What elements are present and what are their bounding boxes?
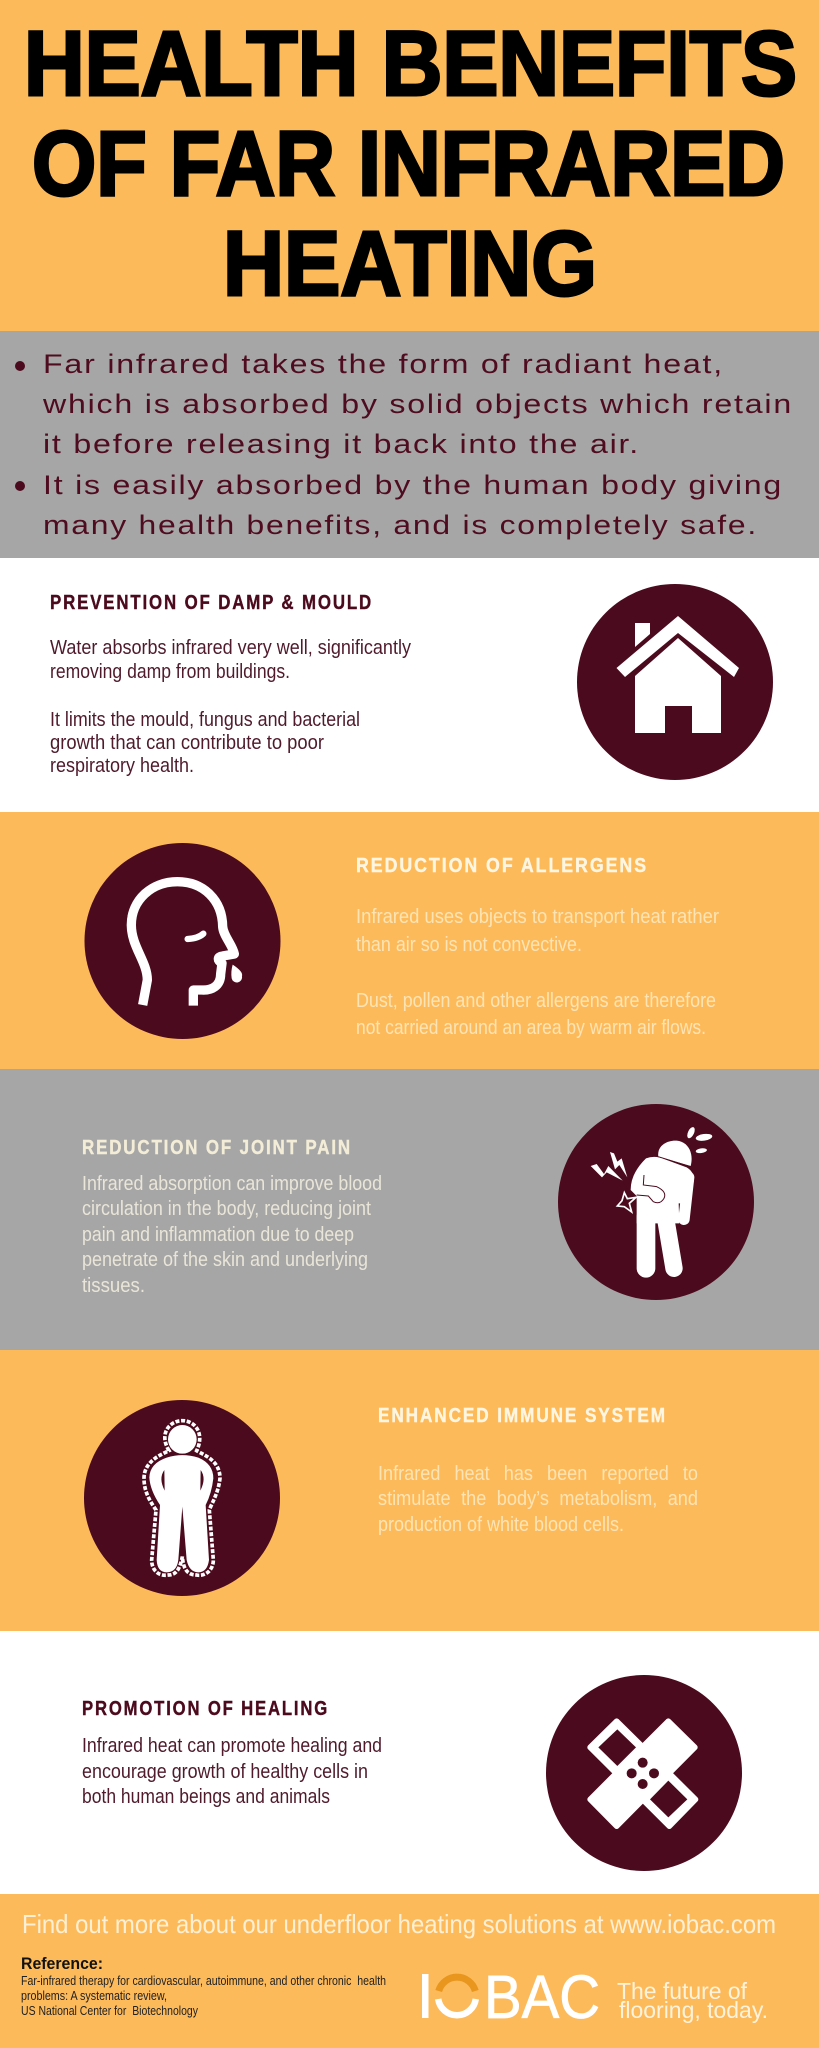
panel: footer (0, 1894, 819, 2048)
reference text: Far-infrared therapy for cardiovascular, autoimmune, and other chronic health (21, 1973, 386, 1988)
reference text: US National Center for Biotechnology (21, 2003, 198, 2018)
bullet point: human body (15, 470, 783, 540)
heading: PROMOTION OF HEALING (82, 1698, 329, 1720)
text block: Infrared uses objects to transport heat rather (356, 906, 719, 928)
icon: house (577, 584, 773, 780)
text block (378, 1463, 698, 1536)
panel: title banner (0, 0, 819, 331)
bullet point: human body: It is easily absorbed by the human body giving (43, 470, 783, 500)
bullet point: far infrared: which is absorbed by solid objects which retain (42, 389, 793, 419)
panel: reduction of joint pain (0, 1069, 819, 1350)
text block: Water absorbs infrared very well, significantly (50, 637, 411, 659)
text block (82, 1735, 382, 1808)
logo tagline: The future of (617, 1978, 748, 2004)
text block: It limits the mould, fungus and bacterial (50, 709, 360, 731)
text block (82, 1173, 382, 1297)
heading: ENHANCED IMMUNE SYSTEM (378, 1405, 667, 1427)
panel: prevention of damp and mould (0, 558, 819, 812)
text block: not carried around an area by warm air flows. (356, 1017, 706, 1039)
text block: penetrate of the skin and underlying (82, 1249, 368, 1271)
text block: encourage growth of healthy cells in (82, 1761, 368, 1783)
panel: introduction (0, 331, 819, 558)
text block: Dust, pollen and other allergens are therefore (356, 990, 716, 1012)
reference text: problems: A systematic review, (21, 1988, 167, 2003)
text block: Infrared heat has been reported to (378, 1463, 698, 1485)
text block: Infrared heat can promote healing and (82, 1735, 382, 1757)
text block: than air so is not convective. (356, 934, 582, 956)
text block: growth that can contribute to poor (50, 732, 324, 754)
bullet point: far infrared: it before releasing it back into the air. (43, 429, 640, 459)
panel: reduction of allergens (0, 812, 819, 1069)
text block: both human beings and animals (82, 1786, 330, 1808)
text block: production of white blood cells. (378, 1514, 624, 1536)
reference text (21, 1973, 386, 2018)
panel: enhanced immune system (0, 1350, 819, 1631)
icon: crossed bandages (546, 1675, 742, 1871)
heading: REDUCTION OF ALLERGENS (356, 855, 648, 877)
icon: person with back pain (558, 1104, 754, 1300)
text block: tissues. (82, 1275, 145, 1297)
reference heading: Reference: (21, 1954, 103, 1973)
logo: IOBAC (422, 1963, 600, 2031)
icon: head with runny nose (84, 843, 280, 1039)
logo tagline (617, 1978, 768, 2023)
text block: stimulate the body’s metabolism, and (378, 1488, 698, 1510)
heading: PREVENTION OF DAMP & MOULD (50, 592, 373, 614)
title: HEATING (223, 213, 597, 315)
text block (50, 637, 411, 777)
call to action: Find out more about our underfloor heating solutions at www.iobac.com (22, 1909, 776, 1939)
heading: REDUCTION OF JOINT PAIN (82, 1137, 352, 1159)
text block: Infrared absorption can improve blood (82, 1173, 382, 1195)
bullet point: far infrared: Far infrared takes the form of radiant heat, (43, 349, 724, 379)
icon: person with protective outline (84, 1400, 280, 1596)
logo tagline: flooring, today. (619, 1997, 768, 2023)
text block: respiratory health. (50, 755, 194, 777)
text block (356, 906, 719, 1039)
panel: promotion of healing (0, 1631, 819, 1894)
text block: removing damp from buildings. (50, 661, 290, 683)
bullet point: far infrared (15, 349, 793, 459)
logo: IOBAC: BAC (484, 1963, 600, 2031)
text block: circulation in the body, reducing joint (82, 1198, 371, 1220)
text block: pain and inflammation due to deep (82, 1224, 354, 1246)
title (24, 13, 797, 315)
bullet point: human body: many health benefits, and is completely safe. (43, 510, 758, 540)
